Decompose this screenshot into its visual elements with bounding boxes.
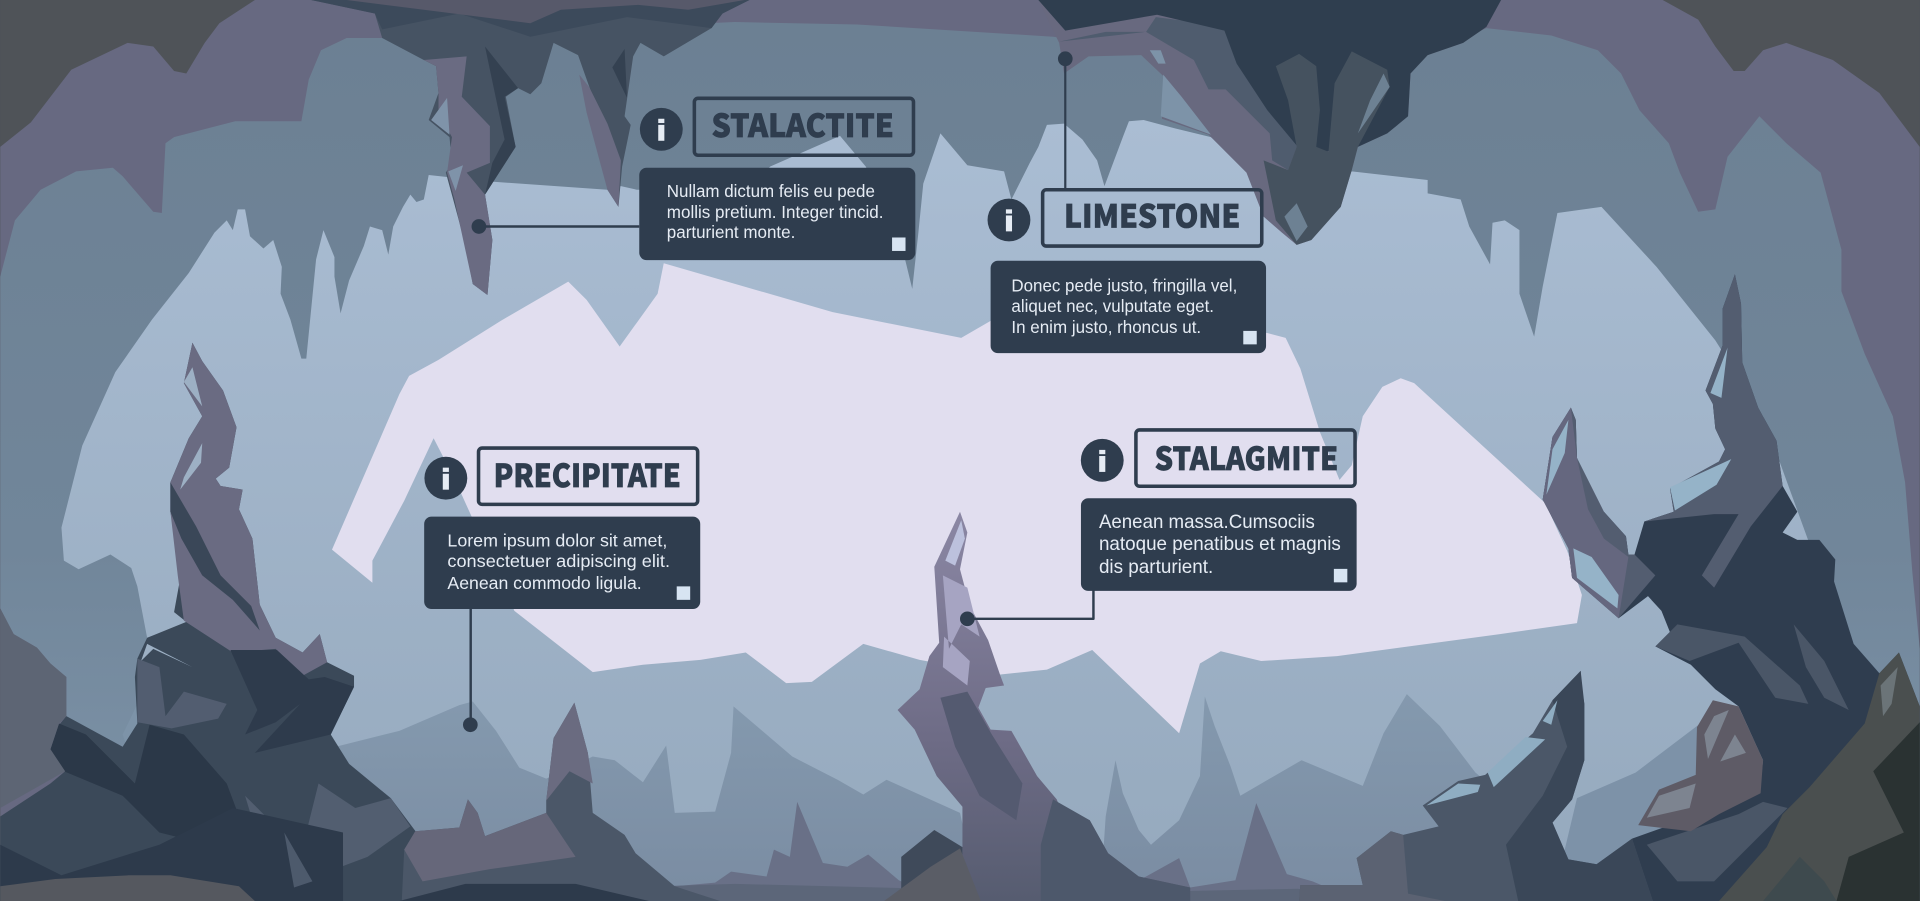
callout: precipitate: PRECIPITATE [494,451,681,497]
ground: right hills [1078,694,1518,901]
brown rock [1638,700,1763,831]
callout: stalactite: STALACTITE [711,101,894,147]
callout: precipitate [424,448,700,732]
top right dark rock [1038,0,1501,245]
ground: lower right basin [1553,719,1763,901]
callout: stalactite: mollis pretium. Integer tincid. [667,202,883,222]
ground: foreground hills [661,802,1359,901]
callout: limestone: Donec pede justo, fringilla vel, [1011,276,1237,296]
callout: stalactite: parturient monte. [667,222,795,242]
callout: stalagmite: natoque penatibus et magnis [1099,534,1341,555]
ground: bottom band [637,884,1371,901]
callout: precipitate: Aenean commodo ligula. [447,573,642,593]
callout: stalagmite: dis parturient. [1099,557,1213,578]
callout: limestone [988,51,1266,353]
lower right rock [1299,671,1653,901]
cave layer: mid lobe [123,704,186,799]
cave layer: lavender opening [332,263,1582,733]
callout: limestone: LIMESTONE [1064,192,1240,238]
far right olive rock [1719,652,1920,901]
centre-left ground rock [399,703,720,901]
callout: precipitate: consectetuer adipiscing elit. [447,551,670,571]
centre stalagmite [898,512,1190,901]
callout: stalactite [472,98,915,260]
callout: precipitate: Lorem ipsum dolor sit amet, [447,531,667,551]
callout: stalactite: Nullam dictum felis eu pede [667,181,875,201]
callout: stalagmite [960,430,1357,626]
callout: limestone: In enim justo, rhoncus ut. [1011,317,1201,337]
callout: stalagmite: STALAGMITE [1155,434,1338,480]
left rock mass [0,343,416,901]
callout: stalagmite: Aenean massa.Cumsociis [1099,512,1315,533]
ground: left and centre hills [331,701,980,901]
foot rock [884,830,981,901]
right rock mass [1543,274,1920,901]
top left stalactites [311,0,749,295]
callout: limestone: aliquet nec, vulputate eget. [1011,296,1214,316]
